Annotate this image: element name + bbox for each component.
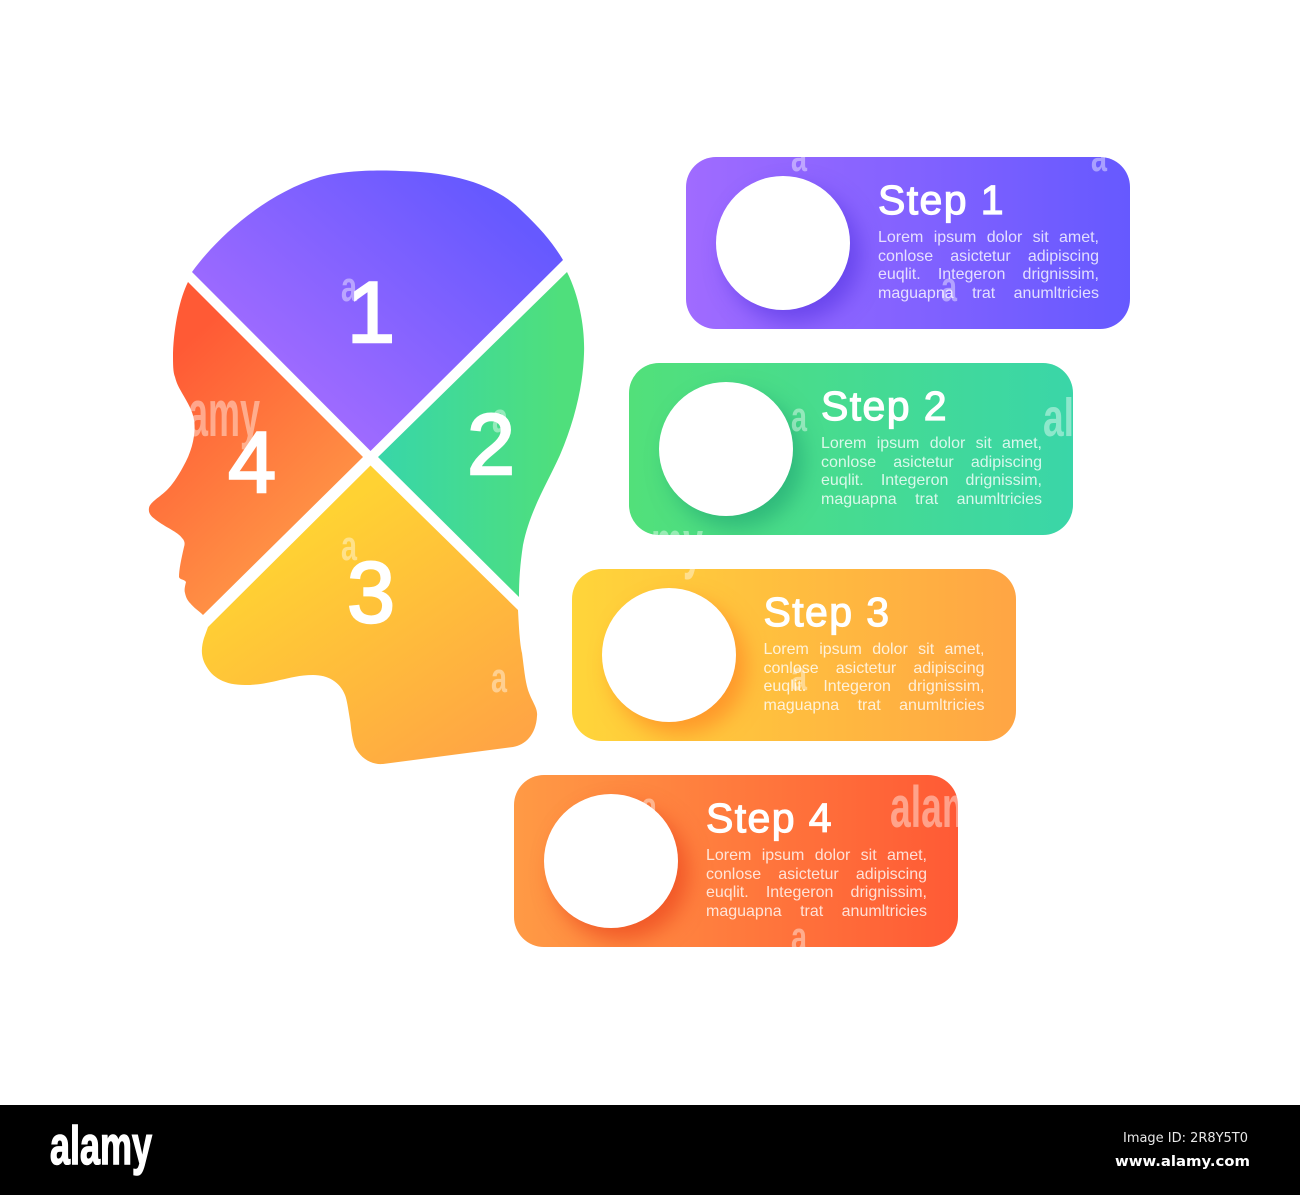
watermark overlay: a	[341, 522, 357, 569]
step 1 text: maguapna trat anumltricies	[878, 285, 1099, 302]
number 3: 3	[347, 545, 395, 641]
circle 3	[602, 588, 736, 722]
step 3 text: euqlit. Integeron drignissim,	[764, 678, 984, 695]
step 3 title: Step 3	[764, 589, 890, 635]
head section 2: green back	[378, 272, 584, 597]
step 2 text: conlose asictetur adipiscing	[821, 454, 1042, 471]
watermark overlay: a	[791, 133, 807, 180]
step 2 text: Lorem ipsum dolor sit amet,	[821, 435, 1042, 452]
step 2 text: euqlit. Integeron drignissim,	[821, 472, 1042, 489]
image id: Image ID: 2R8Y5T0	[1123, 1130, 1248, 1146]
circle 4	[544, 794, 678, 928]
watermark overlay: al	[1043, 388, 1074, 448]
watermark overlay: amy	[188, 376, 260, 450]
step 4 text: maguapna trat anumltricies	[706, 903, 927, 920]
watermark overlay: a	[491, 654, 507, 701]
number 4: 4	[228, 415, 276, 511]
head section 3: yellow jaw and neck	[202, 466, 537, 764]
step 1 text: euqlit. Integeron drignissim,	[878, 266, 1099, 283]
step 3 text: Lorem ipsum dolor sit amet,	[764, 641, 984, 658]
step 4 card	[514, 775, 958, 947]
watermark overlay: a	[641, 783, 657, 830]
step 4 text: conlose asictetur adipiscing	[706, 866, 927, 883]
step 4 text: Lorem ipsum dolor sit amet,	[706, 847, 927, 864]
number 1: 1	[347, 265, 395, 361]
watermark overlay: a	[1091, 133, 1107, 180]
watermark overlay: a	[791, 913, 807, 960]
step 4 text	[706, 847, 927, 920]
step 3 text: conlose asictetur adipiscing	[764, 660, 984, 677]
step 4 text: euqlit. Integeron drignissim,	[706, 884, 927, 901]
head section 1: purple crown	[192, 171, 563, 451]
circle 1	[716, 176, 850, 310]
step 3 text	[764, 641, 984, 714]
watermark overlay: alam	[890, 775, 975, 840]
head section 4: orange face	[149, 282, 363, 615]
watermark overlay: a	[791, 393, 807, 440]
step 2 text: maguapna trat anumltricies	[821, 491, 1042, 508]
watermark overlay: amy	[631, 506, 703, 580]
step 1 title: Step 1	[878, 177, 1005, 223]
step 2 title: Step 2	[821, 383, 948, 429]
watermark overlay: a	[791, 652, 807, 699]
watermark overlay: a	[341, 263, 357, 310]
number 2: 2	[467, 397, 515, 493]
step 3 text: maguapna trat anumltricies	[764, 697, 984, 714]
step 1 card	[686, 157, 1130, 329]
step 1 text: conlose asictetur adipiscing	[878, 248, 1099, 265]
alamy logo: alamy	[50, 1116, 152, 1176]
step 1 text	[878, 229, 1099, 302]
circle 2	[659, 382, 793, 516]
step 3 card	[572, 569, 1016, 741]
footer bar	[0, 1105, 1300, 1195]
watermark overlay: a	[941, 263, 957, 310]
website: www.alamy.com	[1115, 1153, 1250, 1170]
step 1 text: Lorem ipsum dolor sit amet,	[878, 229, 1099, 246]
watermark overlay: a	[492, 394, 508, 441]
step 2 card	[629, 363, 1073, 535]
step 4 title: Step 4	[706, 795, 833, 841]
step 2 text	[821, 435, 1042, 508]
